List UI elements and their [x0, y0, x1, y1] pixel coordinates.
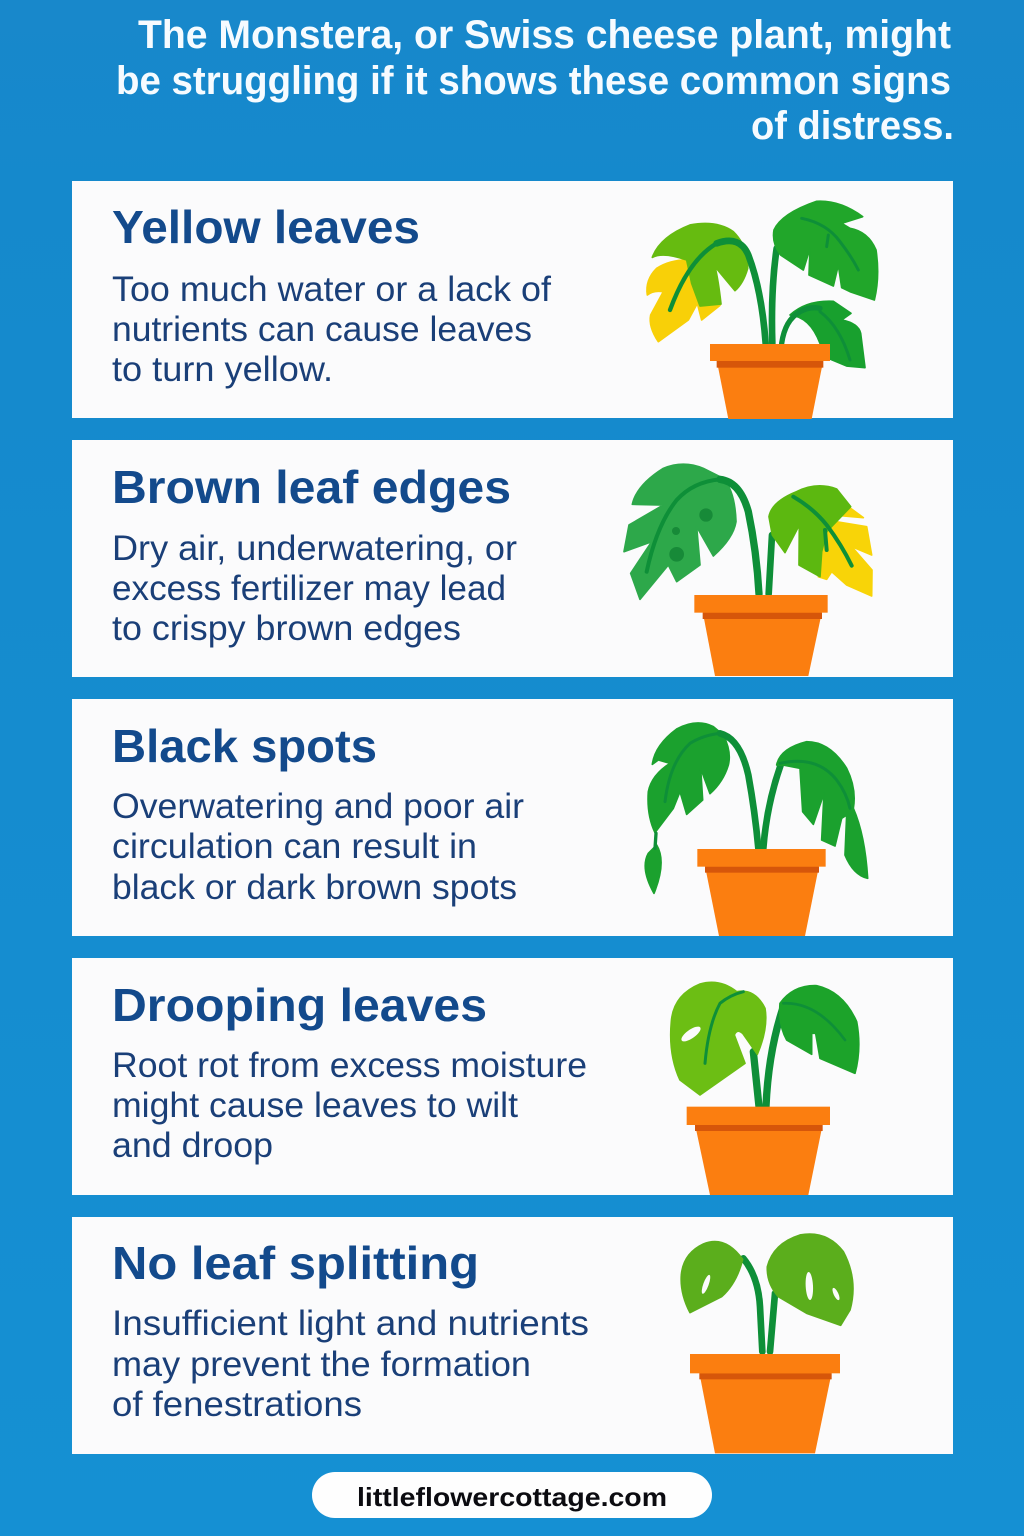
text: drooping leaves description: might cause leaves to wilt	[112, 1086, 518, 1125]
text: black spots description	[112, 787, 524, 907]
website pill: littleflowercottage.com	[357, 1482, 667, 1512]
website pill	[312, 1472, 712, 1518]
text: drooping leaves description: Root rot from excess moisture	[112, 1046, 587, 1085]
pot	[690, 1354, 840, 1453]
heading: no leaf splitting: No leaf splitting	[112, 1237, 479, 1289]
text: brown leaf edges description: excess fertilizer may lead	[112, 569, 506, 608]
text: yellow leaves description	[112, 270, 551, 389]
text: brown leaf edges description: Dry air, underwatering, or	[112, 529, 517, 568]
pot	[687, 1107, 830, 1195]
text: drooping leaves description: and droop	[112, 1126, 273, 1165]
text: black spots description: Overwatering and poor air	[112, 787, 524, 826]
title: The Monstera, or Swiss cheese plant, might	[138, 13, 951, 57]
pot	[710, 344, 830, 419]
text: drooping leaves description	[112, 1046, 587, 1165]
text: no leaf splitting description	[112, 1304, 589, 1424]
text: no leaf splitting description: Insufficient light and nutrients	[112, 1304, 589, 1343]
panel: black spots	[72, 699, 953, 936]
title: be struggling if it shows these common signs	[116, 59, 951, 103]
text: yellow leaves description: Too much water or a lack of	[112, 270, 551, 309]
text: yellow leaves description: to turn yellow.	[112, 350, 333, 389]
heading: brown leaf edges: Brown leaf edges	[112, 461, 511, 513]
icon: monstera with yellowing leaf	[647, 201, 878, 419]
text: no leaf splitting description: of fenestrations	[112, 1385, 362, 1424]
heading: drooping leaves: Drooping leaves	[112, 979, 487, 1031]
pot	[694, 595, 828, 676]
text: brown leaf edges description	[112, 529, 517, 648]
pot	[697, 849, 826, 936]
icon: monstera with spotted and yellow leaves	[624, 464, 872, 676]
panel: brown leaf edges	[72, 440, 953, 677]
heading: black spots: Black spots	[112, 720, 377, 772]
text: black spots description: black or dark brown spots	[112, 868, 517, 907]
panel: yellow leaves	[72, 181, 953, 419]
text: black spots description: circulation can result in	[112, 827, 477, 866]
icon: monstera without splits	[681, 1234, 853, 1453]
title	[116, 13, 954, 148]
text: no leaf splitting description: may prevent the formation	[112, 1345, 531, 1384]
panel: drooping leaves	[72, 958, 953, 1195]
text: brown leaf edges description: to crispy brown edges	[112, 609, 461, 648]
icon: monstera with drooping leaves	[645, 723, 868, 936]
title: of distress.	[751, 104, 954, 148]
text: yellow leaves description: nutrients can cause leaves	[112, 310, 532, 349]
icon: monstera with few splits	[671, 982, 859, 1195]
panel: no leaf splitting	[72, 1217, 953, 1454]
heading: yellow leaves: Yellow leaves	[112, 201, 420, 253]
